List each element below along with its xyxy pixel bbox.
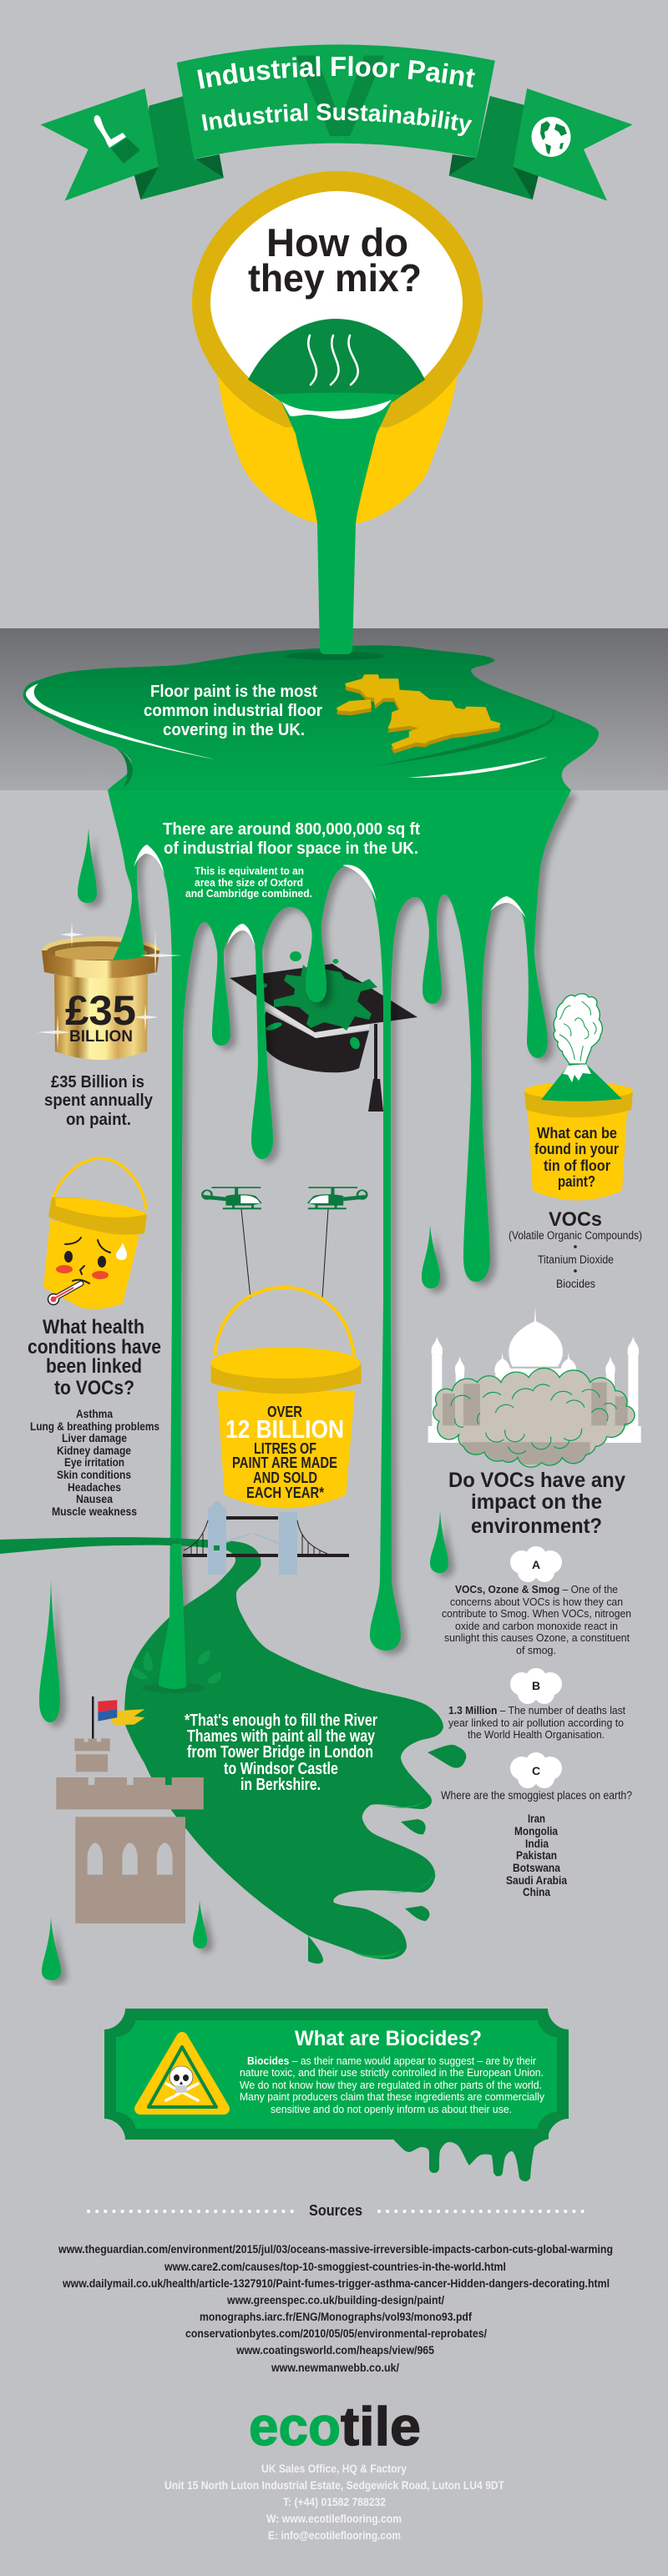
- heading: how do they mix: [248, 220, 422, 300]
- biocides heading: What are Biocides?: [295, 2027, 482, 2050]
- paint highlight: [281, 400, 392, 419]
- text: thames footnote: *That's enough to fill the River: [185, 1711, 377, 1730]
- tin body: [528, 1110, 627, 1200]
- text: thames footnote: from Tower Bridge in London: [187, 1743, 373, 1762]
- text: floor paint common: [144, 683, 322, 739]
- text: floor space: area the size of Oxford: [195, 877, 303, 889]
- heading: health conditions: conditions have: [28, 1336, 161, 1359]
- sources list: www.coatingsworld.com/heaps/view/965: [235, 2344, 434, 2357]
- heading: how do they mix: How do: [266, 220, 408, 265]
- list: health conditions: Kidney damage: [57, 1444, 131, 1457]
- text: 35 billion spent: [44, 1073, 154, 1129]
- text: deaths statistic: year linked to air pollution according to: [448, 1716, 624, 1729]
- list: health conditions: [30, 1407, 159, 1518]
- text: thames footnote: Thames with paint all the way: [187, 1727, 376, 1746]
- text: thames footnote: to Windsor Castle: [224, 1760, 338, 1778]
- list: health conditions: Eye irritation: [64, 1455, 124, 1469]
- bucket label: AND SOLD: [253, 1469, 317, 1486]
- heading: health conditions: been linked: [46, 1355, 142, 1378]
- smoke plume: [554, 994, 602, 1064]
- helicopter cables: [241, 1209, 328, 1298]
- text: deaths statistic: [448, 1704, 625, 1741]
- text: smoggiest places: Mongolia: [514, 1824, 558, 1837]
- sparkles: [37, 922, 182, 1051]
- bucket handle: [215, 1288, 354, 1356]
- footer contact details: T: (+44) 01582 788232: [283, 2495, 386, 2508]
- biocides text: We do not know how they are regulated in other parts of the world.: [240, 2079, 542, 2091]
- graduation cap: [230, 951, 418, 1112]
- text: deaths statistic: 1.3 Million – The number of deaths last: [448, 1704, 625, 1716]
- text: floor paint common: Floor paint is the most: [150, 683, 317, 701]
- ecotile logo: tile: [341, 2396, 421, 2457]
- river thames of paint: [0, 1537, 466, 1964]
- text: smoggiest places: Iran: [528, 1812, 545, 1825]
- heading: how do they mix: they mix?: [248, 256, 422, 300]
- sources list: conservationbytes.com/2010/05/05/environmental-reprobates/: [185, 2327, 487, 2340]
- list: health conditions: Skin conditions: [57, 1468, 131, 1481]
- bucket label: [225, 1404, 344, 1501]
- text: VOCs ozone smog: concerns about VOCs is how they can: [450, 1596, 623, 1608]
- sources heading: Sources: [309, 2202, 362, 2219]
- teardrops: [39, 828, 448, 1722]
- paint stream: [271, 392, 402, 657]
- heading: health conditions: to VOCs?: [54, 1377, 134, 1399]
- castle walls: [56, 1738, 204, 1923]
- text: smoggiest places: Pakistan: [516, 1848, 557, 1862]
- cloud badge B: B: [532, 1679, 540, 1692]
- icon: paint brush: [94, 115, 140, 164]
- volcano: [541, 1064, 622, 1101]
- tin question: tin of floor: [544, 1157, 610, 1174]
- text: VOCs ozone smog: of smog.: [516, 1644, 556, 1656]
- volcano tin: [524, 994, 633, 1200]
- cloud badge A: [510, 1546, 562, 1582]
- drip highlights: [134, 844, 526, 948]
- suspension cables: [184, 1520, 327, 1554]
- text: 35 billion spent: spent annually: [44, 1091, 154, 1110]
- flag: [92, 1696, 144, 1742]
- list: health conditions: Nausea: [76, 1492, 113, 1505]
- text: floor space: [163, 820, 420, 900]
- list: health conditions: Headaches: [68, 1480, 121, 1494]
- panel inner: [116, 2020, 557, 2129]
- footer contact details: E: info@ecotileflooring.com: [268, 2528, 401, 2542]
- bucket body: [210, 1348, 362, 1508]
- text: tin contents: Biocides: [556, 1278, 595, 1290]
- sources list: www.newmanwebb.co.uk/: [271, 2362, 399, 2374]
- footer contact details: W: www.ecotileflooring.com: [266, 2512, 402, 2525]
- text: VOCs ozone smog: [442, 1583, 631, 1656]
- list: health conditions: Asthma: [76, 1407, 113, 1420]
- windsor castle: [56, 1696, 204, 1923]
- text: thames footnote: [185, 1711, 377, 1794]
- heading: VOC environmental impact: Do VOCs have any: [448, 1469, 625, 1492]
- tin question: [534, 1125, 619, 1190]
- text: VOCs ozone smog: oxide and carbon monoxide react in: [455, 1620, 618, 1632]
- list: health conditions: Lung & breathing problems: [30, 1419, 159, 1433]
- river splats: [308, 1745, 466, 1964]
- icon: UK map: [337, 674, 500, 754]
- helicopter right: [307, 1187, 367, 1209]
- bucket label: LITRES OF: [254, 1440, 316, 1457]
- title ribbon: [40, 31, 633, 201]
- icon: skull and crossbones: [166, 2066, 198, 2100]
- text: VOCs ozone smog: VOCs, Ozone & Smog – One of the: [455, 1583, 618, 1596]
- bucket label: 12 BILLION: [225, 1414, 344, 1444]
- sources list: [58, 2243, 613, 2374]
- icon: hazard sign: [140, 2038, 224, 2109]
- ecotile logo: eco: [249, 2396, 341, 2457]
- footer contact details: Unit 15 North Luton Industrial Estate, Sedgewick Road, Luton LU4 9DT: [164, 2478, 504, 2492]
- title ribbon: Industrial Floor Paint: [197, 56, 475, 88]
- taj silhouette: [428, 1308, 641, 1443]
- cloud badge B: [510, 1668, 562, 1704]
- sources list: www.theguardian.com/environment/2015/jul/03/oceans-massive-irreversible-impacts-carbon-cuts-global-warming: [58, 2243, 613, 2256]
- gold bucket front: BILLION: [69, 1028, 133, 1046]
- drip overlay over river: [159, 1544, 186, 1689]
- gold bucket back: [42, 936, 159, 965]
- biocides text: nature toxic, and their use strictly controlled in the European Union.: [240, 2066, 544, 2079]
- text: smoggiest places: Saudi Arabia: [506, 1873, 567, 1887]
- title ribbon: Industrial Sustainability: [202, 103, 473, 136]
- sources list: www.dailymail.co.uk/health/article-1327910/Paint-fumes-trigger-asthma-cancer-Hidden-dangers-decorating.html: [62, 2277, 610, 2290]
- smog cloud: [433, 1369, 635, 1467]
- text: tin contents: [509, 1208, 642, 1290]
- thermometer: [48, 1283, 81, 1305]
- bucket label: EACH YEAR*: [246, 1485, 324, 1501]
- text: 35 billion spent: £35 Billion is: [51, 1073, 144, 1091]
- big yellow bucket: [210, 1288, 362, 1508]
- splash petals: [132, 1650, 221, 1684]
- bucket label: OVER: [267, 1404, 302, 1420]
- taj mahal in smog: [428, 1308, 641, 1467]
- text: VOCs ozone smog: contribute to Smog. When VOCs, nitrogen: [442, 1607, 631, 1620]
- river highlights: [352, 1796, 436, 1958]
- cloud badge C: C: [532, 1764, 540, 1777]
- paint drips from floor: [108, 790, 571, 1689]
- teardrops by castle: [42, 1900, 207, 1980]
- cloud badge C: [510, 1752, 562, 1788]
- text: 35 billion spent: on paint.: [66, 1111, 131, 1129]
- raised bascules: [225, 1534, 280, 1544]
- text: smoggiest places: Botswana: [513, 1861, 560, 1874]
- heading: VOC environmental impact: environment?: [471, 1515, 602, 1538]
- footer contact details: [164, 2462, 504, 2542]
- bucket body: [217, 373, 458, 523]
- text: tin contents: Titanium Dioxide: [538, 1253, 614, 1266]
- helicopter left: [202, 1187, 262, 1209]
- sources list: www.greenspec.co.uk/building-design/paint/: [226, 2294, 444, 2306]
- cloud badge A: A: [532, 1558, 540, 1571]
- text: floor space: of industrial floor space in the UK.: [164, 839, 418, 858]
- paint puddle: [23, 634, 599, 790]
- tin question: paint?: [558, 1173, 595, 1190]
- text: smoggiest places: China: [523, 1885, 550, 1898]
- bucket inner opening: [210, 191, 463, 402]
- list: health conditions: Muscle weakness: [52, 1505, 137, 1518]
- biocides text: sensitive and do not openly inform us about their use.: [271, 2103, 512, 2115]
- text: floor space: There are around 800,000,000 sq ft: [163, 820, 420, 839]
- tassel: [368, 1024, 383, 1112]
- bridge walkway and deck: [183, 1516, 349, 1557]
- text: smoggiest places: [441, 1788, 632, 1898]
- tin question: found in your: [534, 1141, 619, 1157]
- ecotile logo: [249, 2396, 421, 2457]
- sources list: www.care2.com/causes/top-10-smoggiest-countries-in-the-world.html: [164, 2261, 506, 2273]
- icon: globe: [531, 117, 571, 157]
- ribbon V letter: V: [295, 31, 385, 161]
- panel drips: [394, 2133, 549, 2181]
- text: VOCs ozone smog: sunlight this causes Ozone, a constituent: [444, 1631, 630, 1644]
- gold bucket front: [37, 922, 182, 1060]
- tin rim: [524, 1091, 633, 1117]
- bucket label: PAINT ARE MADE: [232, 1454, 337, 1471]
- paint bucket tipping: [192, 171, 483, 657]
- list: health conditions: Liver damage: [62, 1431, 127, 1444]
- heading: VOC environmental impact: impact on the: [471, 1490, 602, 1514]
- text: floor space: This is equivalent to an: [195, 865, 304, 877]
- paint splat on cap: [274, 965, 377, 1031]
- text: floor paint common: covering in the UK.: [163, 721, 305, 739]
- text: smoggiest places: Where are the smoggiest places on earth?: [441, 1788, 632, 1802]
- paint dome with steam: [248, 319, 425, 402]
- text: smoggiest places: India: [525, 1837, 549, 1850]
- biocides text: Biocides – as their name would appear to suggest – are by their: [247, 2054, 537, 2067]
- bridge towers: [208, 1500, 226, 1575]
- sources list: monographs.iarc.fr/ENG/Monographs/vol93/mono93.pdf: [200, 2311, 472, 2323]
- sad paint bucket: [43, 1158, 147, 1309]
- panel frame: [104, 2009, 569, 2140]
- text: thames footnote: in Berkshire.: [240, 1776, 321, 1794]
- text: deaths statistic: the World Health Organisation.: [468, 1728, 605, 1741]
- heading: health conditions: [28, 1316, 161, 1399]
- price label: £35: [65, 987, 136, 1034]
- panel: biocides: [104, 2009, 569, 2181]
- tin question: What can be: [537, 1125, 617, 1142]
- text: tin contents: (Volatile Organic Compounds): [509, 1229, 642, 1242]
- text: floor paint common: common industrial floor: [144, 702, 322, 720]
- tower bridge: [183, 1500, 349, 1575]
- text: tin contents: VOCs: [549, 1208, 602, 1231]
- floor band: [0, 628, 668, 790]
- biocides text: Many paint producers claim that these ingredients are commercially: [240, 2090, 544, 2103]
- heading: health conditions: What health: [43, 1316, 144, 1338]
- bucket rim: [192, 171, 483, 427]
- biocides text: [240, 2054, 544, 2115]
- footer contact details: UK Sales Office, HQ & Factory: [261, 2462, 407, 2475]
- sick face: [56, 1238, 127, 1283]
- text: floor space: and Cambridge combined.: [185, 888, 312, 900]
- heading: VOC environmental impact: [448, 1469, 625, 1538]
- ribbon title text: [194, 76, 478, 90]
